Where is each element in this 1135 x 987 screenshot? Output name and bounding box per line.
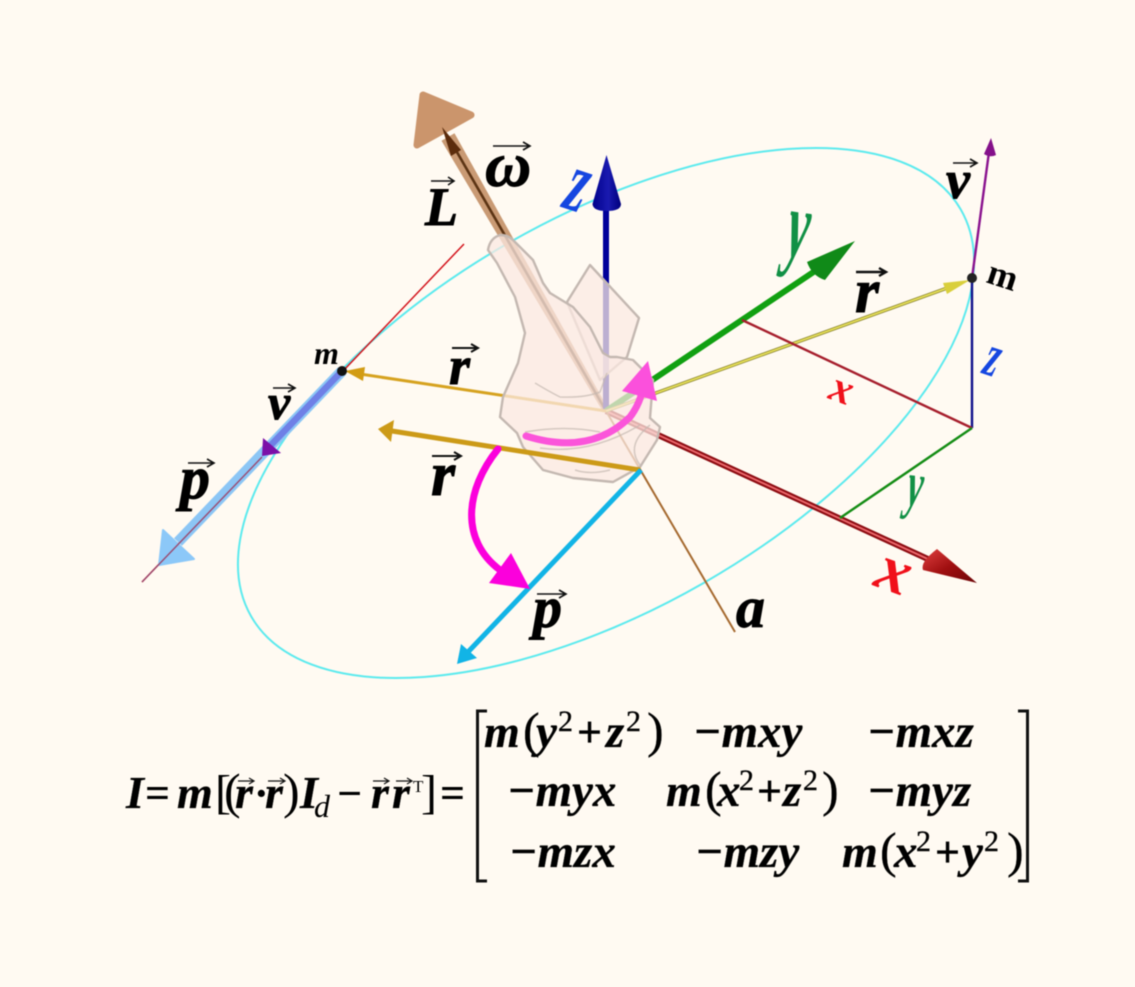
formula: tensor definition: d <box>314 788 331 824</box>
matrix left bracket <box>478 711 487 881</box>
label: red X axis: x <box>866 530 923 610</box>
formula: tensor definition: r <box>392 767 411 818</box>
matrix row 1: ) <box>647 702 664 758</box>
left momentum arrow <box>142 371 342 582</box>
omega arrow <box>417 95 609 412</box>
formula: tensor definition: [ <box>215 766 231 819</box>
label: small blue z: z <box>975 320 1012 390</box>
label: right m: m <box>983 252 1023 299</box>
x axis arrow <box>606 411 977 583</box>
label: a: a <box>736 575 765 640</box>
label: green y axis: y <box>776 169 818 280</box>
matrix row 2: + <box>757 767 782 816</box>
matrix row 2: 2 <box>803 764 818 797</box>
matrix row 3: ) <box>1007 822 1024 878</box>
formula: tensor definition: I <box>125 767 146 818</box>
matrix row 1: 2 <box>626 705 641 738</box>
matrix row 1: −mxy <box>693 706 803 758</box>
matrix row 1: ( <box>523 702 540 758</box>
label: left m: m <box>314 335 339 371</box>
formula: tensor definition: · <box>254 769 269 818</box>
matrix row 1: + <box>577 708 602 757</box>
matrix row 3 <box>509 822 1024 878</box>
label: left p: p <box>175 445 210 511</box>
label: small red x: x <box>823 361 861 415</box>
formula: tensor definition: I <box>299 767 320 818</box>
matrix row 1 <box>484 702 975 758</box>
matrix row 2 <box>507 761 972 817</box>
matrix row 1: 2 <box>558 705 573 738</box>
matrix row 1: y <box>531 706 557 758</box>
matrix row 2: m <box>666 765 702 816</box>
axis line a <box>606 411 735 632</box>
matrix row 2: x <box>716 765 740 817</box>
right mass dot <box>967 273 977 283</box>
matrix row 2: 2 <box>739 764 754 797</box>
left gold position vector <box>345 367 606 411</box>
label: top right r: r <box>855 258 880 326</box>
orbit ellipse <box>154 40 1058 786</box>
matrix row 3: y <box>957 826 983 878</box>
label: lower r: r <box>431 441 456 509</box>
matrix row 3: 2 <box>984 825 999 858</box>
matrix row 3: −mzx <box>509 826 616 878</box>
z axis arrow <box>592 155 621 411</box>
formula: tensor definition: ) <box>283 763 300 819</box>
matrix row 1: m <box>484 706 520 757</box>
matrix row 3: −mzy <box>695 826 799 878</box>
matrix row 2: −myx <box>507 765 616 817</box>
matrix row 3: x <box>893 826 918 878</box>
label: L: L <box>424 177 458 237</box>
yellow position vector to right mass <box>606 280 970 411</box>
matrix right bracket <box>1018 711 1028 881</box>
label: small green y: y <box>899 448 929 522</box>
matrix row 3: 2 <box>916 825 931 858</box>
formula: tensor definition: = <box>145 769 170 818</box>
matrix row 2: ( <box>705 761 722 817</box>
formula: tensor definition <box>125 763 465 824</box>
magenta rotation arrow <box>472 449 530 589</box>
coordinate projection lines <box>742 278 972 518</box>
label: omega: ω <box>485 129 531 200</box>
magenta curl arrow in hand <box>526 361 657 443</box>
angular momentum L arrow <box>442 127 606 411</box>
matrix row 3: + <box>935 828 960 877</box>
cyan momentum arrow <box>457 470 641 664</box>
formula: tensor definition: r <box>265 767 284 818</box>
formula: tensor definition: r <box>371 767 390 818</box>
right velocity arrow <box>972 138 996 278</box>
formula: tensor definition: = <box>440 769 465 818</box>
label: left r: r <box>449 336 471 396</box>
matrix row 3: ( <box>880 822 897 878</box>
red tangent line <box>142 244 464 582</box>
label: lower p: p <box>528 575 562 640</box>
formula: tensor definition: ( <box>224 763 241 819</box>
left mass dot <box>337 366 347 376</box>
gold r arrow <box>378 420 640 470</box>
matrix row 3: m <box>842 826 878 877</box>
y axis arrow <box>606 241 855 411</box>
formula: tensor definition: m <box>177 767 213 818</box>
left velocity arrowhead <box>262 438 281 456</box>
formula: tensor definition: ] <box>421 766 437 819</box>
label: left v: v <box>268 374 291 430</box>
matrix row 1: −mxz <box>867 706 975 758</box>
matrix row 2: ) <box>822 761 839 817</box>
label: blue z axis: z <box>553 131 605 232</box>
formula: tensor definition: T <box>413 777 424 796</box>
formula: tensor definition: r <box>235 767 254 818</box>
label: right v: v <box>946 150 971 210</box>
formula: tensor definition: − <box>337 769 362 818</box>
matrix row 2: z <box>781 765 802 817</box>
matrix row 2: −myz <box>867 765 972 817</box>
matrix row 1: z <box>604 706 625 758</box>
hand <box>488 235 660 482</box>
